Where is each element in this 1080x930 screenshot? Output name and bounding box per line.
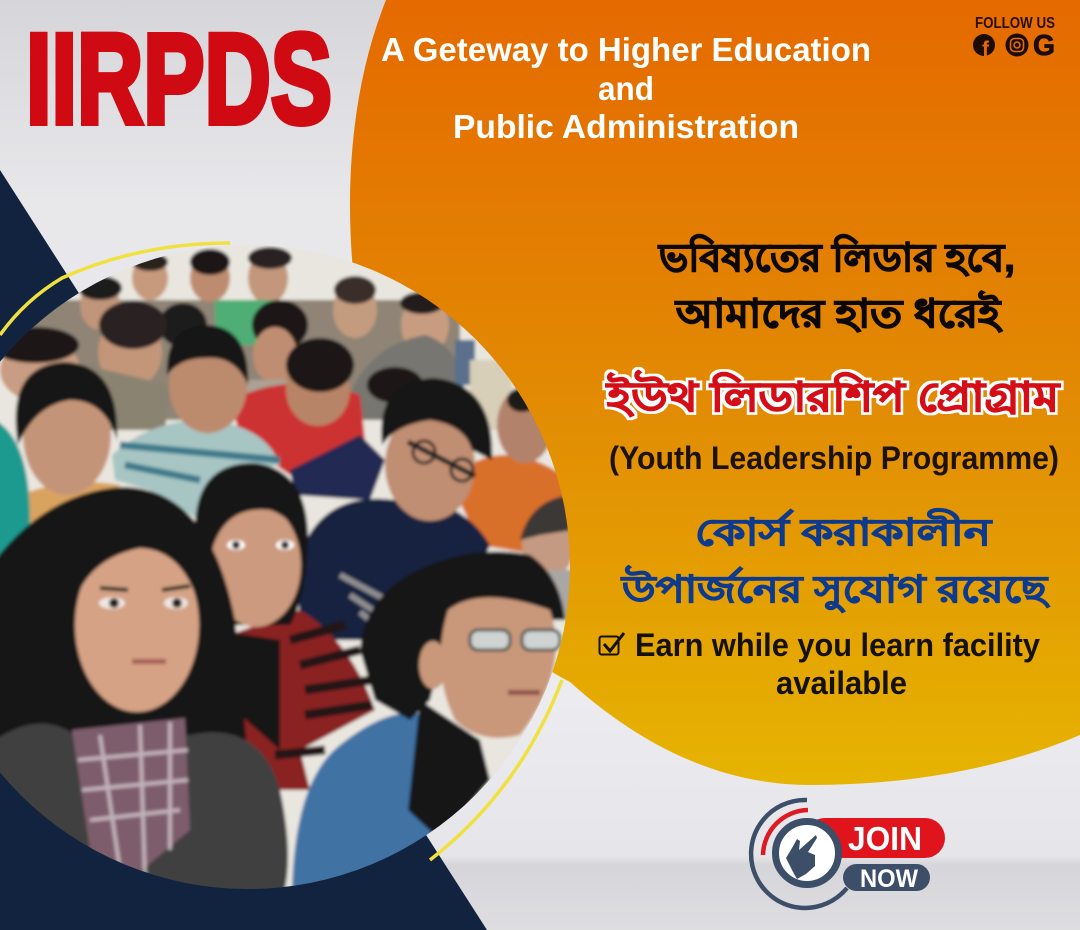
- hand icon: [786, 835, 817, 879]
- icon: instagram: [1006, 34, 1028, 56]
- Bengali programme name: ইউথ লিডারশিপ প্রোগ্রাম: [605, 370, 1060, 420]
- earn while you learn text: available: [776, 665, 907, 701]
- earn while you learn text: [635, 627, 1040, 701]
- boy at left: [0, 360, 122, 560]
- boy in striped shirt: [112, 325, 280, 520]
- Bengali headline: [657, 234, 1015, 336]
- yellow ring: [0, 243, 230, 335]
- Bengali headline: ভবিষ্যতের লিডার হবে,: [657, 234, 1015, 280]
- girl in striped sweater: [195, 463, 375, 790]
- heading: gateway: and: [598, 70, 654, 107]
- navy corner shape: [0, 170, 487, 930]
- photo circle: [0, 240, 580, 900]
- orange shirt boy and person at right: [290, 367, 580, 620]
- back row crowd: [0, 247, 512, 430]
- follow us: [973, 15, 1055, 62]
- label NOW: NOW: [860, 865, 918, 893]
- boy in red shirt: [232, 338, 365, 475]
- orange panel: [350, 0, 1080, 785]
- Bengali earn line: উপার্জনের সুযোগ রয়েছে: [620, 565, 1050, 613]
- follow us: FOLLOW US: [975, 15, 1055, 32]
- label JOIN: JOIN: [848, 820, 922, 857]
- title: IIRPDS: IIRPDS: [26, 8, 332, 151]
- hand icon circle: [776, 822, 838, 884]
- icon: checkbox: [600, 633, 624, 654]
- icon: google: G: [1033, 30, 1055, 62]
- earn while you learn text: Earn while you learn facility: [635, 627, 1040, 663]
- Bengali earn line: [620, 508, 1050, 613]
- Bengali headline: আমাদের হাত ধরেই: [674, 290, 1003, 336]
- heading: gateway: Public Administration: [453, 108, 799, 145]
- girl in grey jacket: [0, 480, 288, 900]
- boy with glasses in navy t-shirt: [298, 378, 492, 640]
- navy NOW pill: [843, 864, 930, 891]
- programme name in English: (Youth Leadership Programme): [609, 440, 1059, 476]
- arcs: [751, 800, 847, 908]
- girl in denim jacket: [292, 552, 565, 895]
- Bengali earn line: কোর্স করাকালীন: [695, 508, 993, 553]
- red JOIN pill: [805, 818, 945, 858]
- join now button: [751, 800, 945, 908]
- heading: gateway: [381, 31, 871, 145]
- icon: facebook: f: [982, 38, 990, 61]
- heading: gateway: A Geteway to Higher Education: [381, 31, 871, 68]
